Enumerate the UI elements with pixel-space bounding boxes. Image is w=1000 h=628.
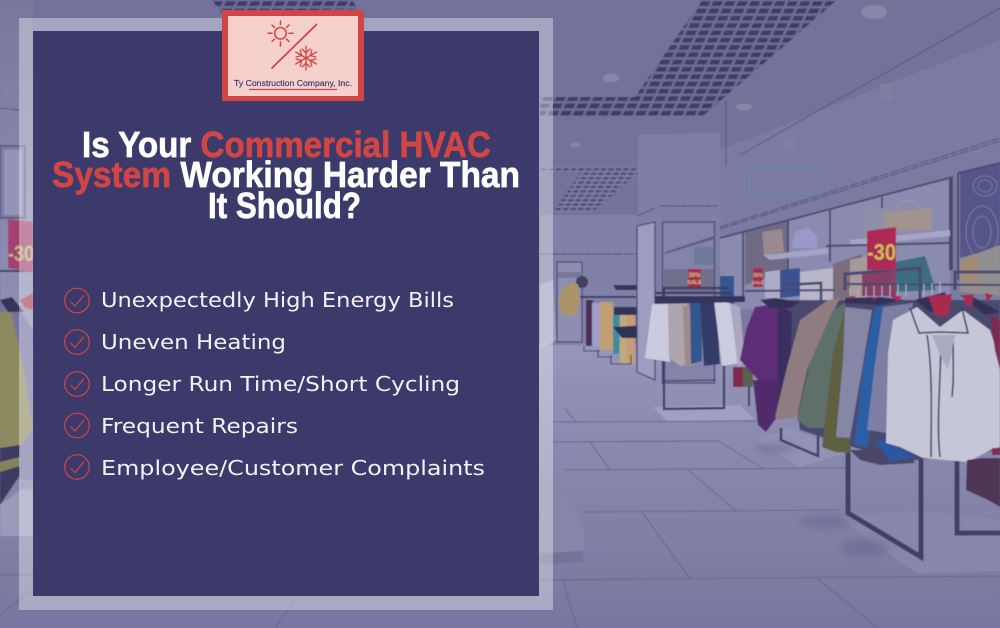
logo badge xyxy=(222,10,364,101)
title: System Working Harder Than xyxy=(52,154,520,195)
floor shadows xyxy=(755,443,889,557)
large -30 sale sign: -30 xyxy=(867,239,896,265)
dark garment hem xyxy=(850,450,915,465)
left edge store photo section: -30 xyxy=(8,241,34,266)
main rack stand xyxy=(781,420,1000,557)
title: Is Your Commercial HVAC xyxy=(82,124,491,165)
icon: sun xyxy=(268,21,293,46)
small sale signs: SALE xyxy=(752,280,764,285)
middle clothing rack xyxy=(645,276,753,409)
purple garment xyxy=(740,304,792,432)
red tags xyxy=(848,293,993,316)
back wall windows and displays xyxy=(720,163,1000,310)
background garments behind main rack xyxy=(765,245,1000,302)
ceiling grid panels xyxy=(212,0,837,212)
translucent panel frame xyxy=(19,18,553,610)
white shirt xyxy=(886,307,1000,462)
underline xyxy=(249,88,337,90)
blue sign outline xyxy=(749,168,828,194)
title: It Should? xyxy=(208,185,361,226)
small sale signs: SALE xyxy=(687,280,702,286)
garment backing shadow xyxy=(780,300,1000,462)
mirror panels xyxy=(637,222,714,383)
green coat xyxy=(797,303,845,428)
item: complaints: Employee/Customer Complaints xyxy=(101,456,485,480)
blue shirt xyxy=(854,306,884,447)
dark hangers and shoulder tops xyxy=(760,292,1000,315)
left edge store photo section xyxy=(0,146,34,536)
hanger row xyxy=(850,282,940,300)
small sale signs: 30% xyxy=(753,273,764,279)
title xyxy=(52,124,520,226)
small sale signs xyxy=(687,268,764,287)
item: longer run time: Longer Run Time/Short Cycling xyxy=(101,372,460,396)
item: uneven heating: Uneven Heating xyxy=(101,330,286,354)
wall vent strips xyxy=(0,108,1000,254)
wall and column xyxy=(0,0,1000,350)
floor xyxy=(0,345,1000,628)
ceiling lights xyxy=(570,5,887,148)
right side garments xyxy=(966,315,1000,507)
item: frequent repairs: Frequent Repairs xyxy=(101,414,298,438)
olive garment xyxy=(822,307,850,453)
item: high energy bills: Unexpectedly High Energy Bills xyxy=(101,288,454,312)
main rack top frame xyxy=(745,268,1000,305)
striped shirt xyxy=(836,307,872,438)
icon: diagonal slash xyxy=(272,24,316,68)
grey speckled shirt xyxy=(867,303,913,433)
main navy panel xyxy=(33,31,539,596)
large -30 sale sign xyxy=(867,227,896,270)
track lighting wire xyxy=(726,8,1000,165)
display platforms xyxy=(540,405,1000,574)
floor tile lines xyxy=(0,409,1000,628)
left clothing rack xyxy=(540,262,655,364)
tan coat xyxy=(775,298,840,420)
checklist xyxy=(65,288,485,480)
small sale signs: 30% xyxy=(688,273,701,279)
company name: Ty Construction Company, Inc. xyxy=(234,79,352,88)
icon: snowflake xyxy=(294,46,318,70)
